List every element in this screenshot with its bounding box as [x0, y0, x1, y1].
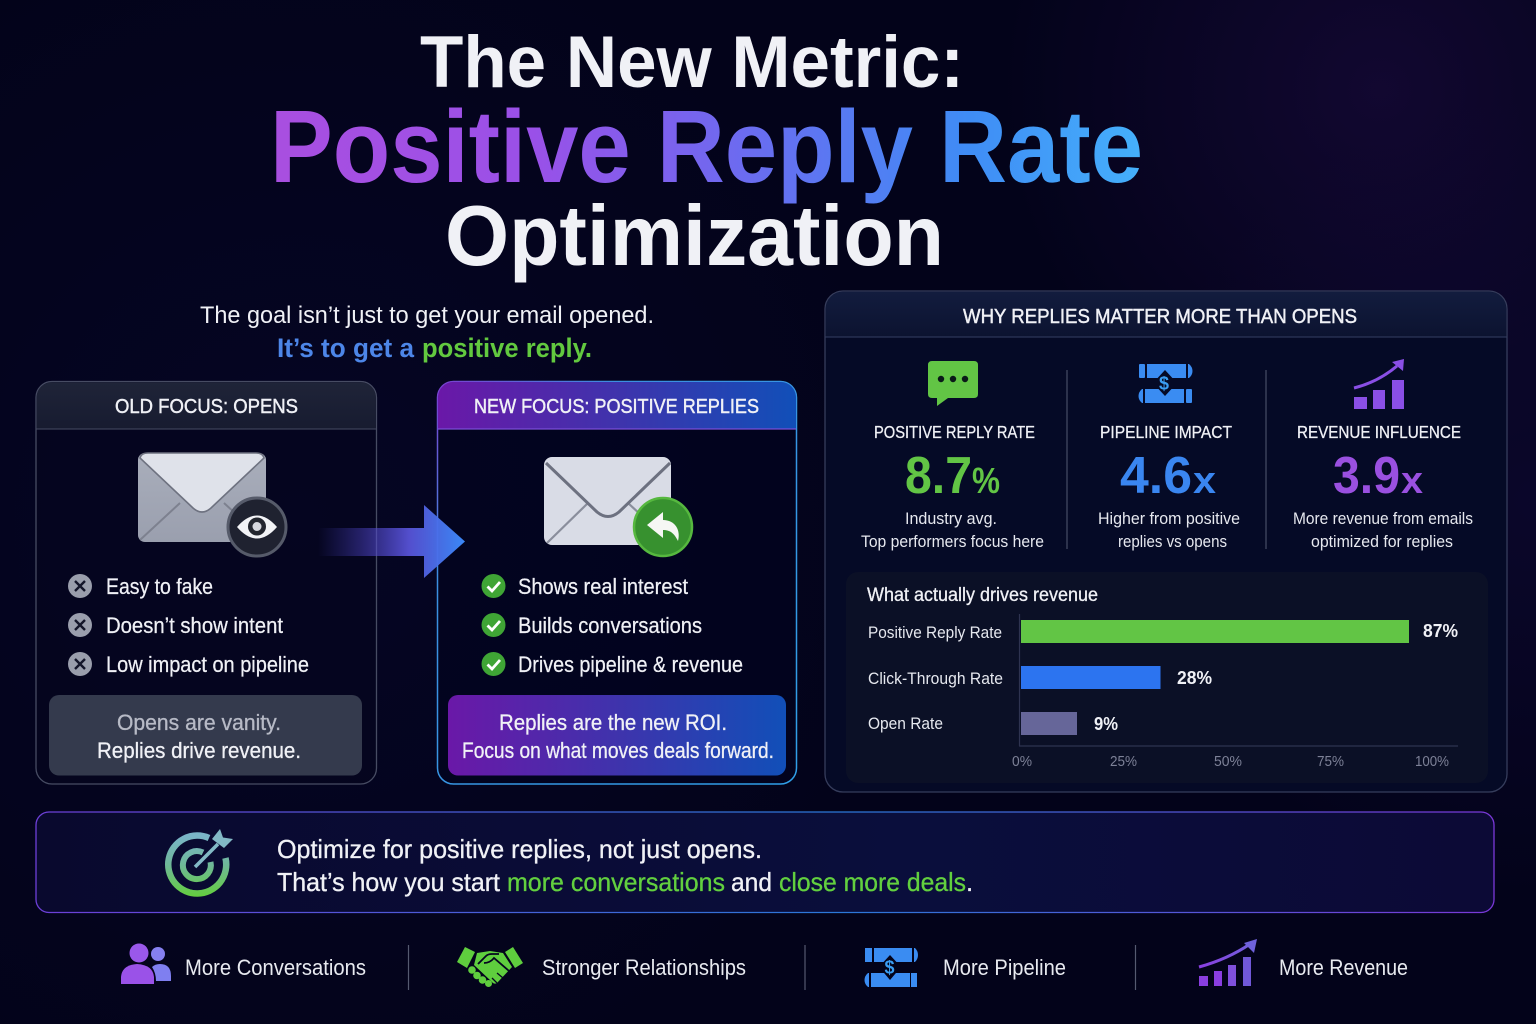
icon: white envelope with reply arrow — [544, 457, 692, 556]
bar: click-through rate 28 percent: 28% — [1177, 668, 1212, 688]
old focus callout — [49, 695, 362, 776]
metric: positive reply rate: Top performers focus here — [861, 532, 1044, 551]
new focus callout: Focus on what moves deals forward. — [462, 738, 774, 763]
new focus callout — [448, 695, 786, 776]
metric: positive reply rate: 8.7 — [905, 447, 972, 505]
icon: pipeline dollar — [1138, 364, 1192, 403]
subtitle — [200, 302, 654, 363]
old focus callout: Replies drive revenue. — [97, 738, 301, 763]
metric: pipeline impact — [1098, 364, 1240, 551]
metric: revenue influence — [1293, 359, 1473, 551]
metric: revenue influence: REVENUE INFLUENCE — [1297, 422, 1461, 442]
icon: handshake — [457, 947, 523, 987]
item: easy to fake — [68, 574, 213, 599]
item: does not show intent: Doesn’t show intent — [106, 613, 283, 638]
chart axis labels: 25% — [1110, 754, 1137, 770]
icon: chat bubble — [928, 361, 978, 406]
icon: rising bar chart — [1354, 359, 1404, 409]
bar: click-through rate 28 percent: Click-Through Rate — [868, 669, 1003, 688]
metric: positive reply rate — [861, 361, 1044, 551]
subtitle: The goal isn’t just to get your email opened. — [200, 302, 654, 329]
metric: positive reply rate: % — [972, 460, 1000, 501]
chart axis labels — [1012, 754, 1449, 770]
bar: open rate 9 percent — [868, 712, 1118, 735]
metric: pipeline impact: Higher from positive — [1098, 509, 1240, 528]
old focus heading: OLD FOCUS: OPENS — [115, 396, 298, 418]
icon: grey envelope with eye — [138, 453, 286, 556]
title: Positive Reply Rate — [270, 89, 1143, 204]
banner text — [277, 834, 973, 897]
benefit: more pipeline: More Pipeline — [943, 955, 1066, 980]
new focus heading — [438, 382, 796, 429]
banner: optimize for positive replies — [36, 812, 1494, 912]
banner text: Optimize for positive replies, not just opens. — [277, 834, 762, 864]
benefit: stronger relationships: Stronger Relationships — [542, 955, 746, 980]
item: drives pipeline and revenue: Drives pipeline & revenue — [518, 652, 743, 677]
new focus list — [482, 574, 743, 677]
chart axis labels: 75% — [1317, 754, 1344, 770]
bar chart: what actually drives revenue — [846, 572, 1488, 783]
metric: revenue influence: 3.9 — [1333, 447, 1400, 505]
title: The New Metric: — [420, 22, 964, 103]
icon: rising bars small — [1199, 939, 1257, 986]
panel: old focus opens — [36, 382, 376, 784]
subtitle: positive reply. — [422, 333, 592, 363]
metric: pipeline impact: x — [1193, 460, 1216, 502]
metric: revenue influence: x — [1401, 460, 1423, 502]
benefit: more conversations: More Conversations — [185, 955, 366, 980]
benefit: more revenue — [1199, 939, 1408, 986]
benefit: more revenue: More Revenue — [1279, 955, 1408, 980]
bar: positive reply rate 87 percent: 87% — [1423, 621, 1458, 641]
chart axis labels: 100% — [1415, 754, 1449, 770]
banner text: That’s how you start — [277, 867, 501, 897]
icon: pipeline dollar: $ — [1159, 374, 1169, 394]
item: shows real interest: Shows real interest — [518, 574, 688, 599]
metric: positive reply rate: Industry avg. — [905, 509, 997, 528]
old focus list — [68, 574, 309, 677]
banner text: close more deals — [779, 867, 966, 897]
banner text: more conversations — [507, 867, 725, 897]
why replies heading — [826, 292, 1506, 337]
metric: pipeline impact: replies vs opens — [1118, 532, 1227, 551]
chart axis labels: 50% — [1214, 754, 1242, 770]
panel: new focus positive replies — [438, 382, 796, 784]
why replies heading: WHY REPLIES MATTER MORE THAN OPENS — [963, 306, 1357, 328]
metric: pipeline impact: PIPELINE IMPACT — [1100, 422, 1232, 442]
icon: target with dart — [168, 829, 233, 894]
icon: pipeline dollar small: $ — [884, 958, 895, 978]
benefit: more pipeline — [864, 948, 1066, 987]
subtitle: It’s to get a — [277, 333, 414, 363]
metric: revenue influence: More revenue from emails — [1293, 509, 1473, 528]
benefit: more conversations — [121, 944, 366, 984]
old focus heading — [36, 382, 376, 429]
new focus callout: Replies are the new ROI. — [499, 710, 727, 735]
item: builds conversations: Builds conversations — [518, 613, 702, 638]
bar: click-through rate 28 percent — [868, 666, 1212, 689]
metric: positive reply rate: POSITIVE REPLY RATE — [874, 422, 1035, 442]
title — [270, 22, 1143, 284]
chart title: What actually drives revenue — [867, 585, 1098, 606]
item: low impact on pipeline: Low impact on pipeline — [106, 652, 309, 677]
item: easy to fake: Easy to fake — [106, 574, 213, 599]
new focus heading: NEW FOCUS: POSITIVE REPLIES — [474, 396, 759, 418]
bar: open rate 9 percent: Open Rate — [868, 714, 943, 733]
old focus callout: Opens are vanity. — [117, 710, 281, 735]
panel: why replies matter more than opens — [825, 291, 1507, 792]
bar: open rate 9 percent: 9% — [1094, 714, 1118, 734]
metric: pipeline impact: 4.6 — [1120, 447, 1192, 505]
banner text: and — [731, 867, 772, 897]
arrow: old focus to new focus — [318, 505, 465, 578]
metric: revenue influence: optimized for replies — [1311, 532, 1453, 551]
bar: positive reply rate 87 percent: Positive Reply Rate — [868, 623, 1002, 642]
bar: positive reply rate 87 percent — [868, 620, 1458, 643]
benefit: stronger relationships — [457, 947, 746, 987]
title: Optimization — [445, 189, 944, 284]
banner text: . — [966, 867, 973, 897]
icon: people — [121, 944, 171, 984]
chart axis labels: 0% — [1012, 754, 1032, 770]
icon: pipeline dollar small — [864, 948, 918, 987]
